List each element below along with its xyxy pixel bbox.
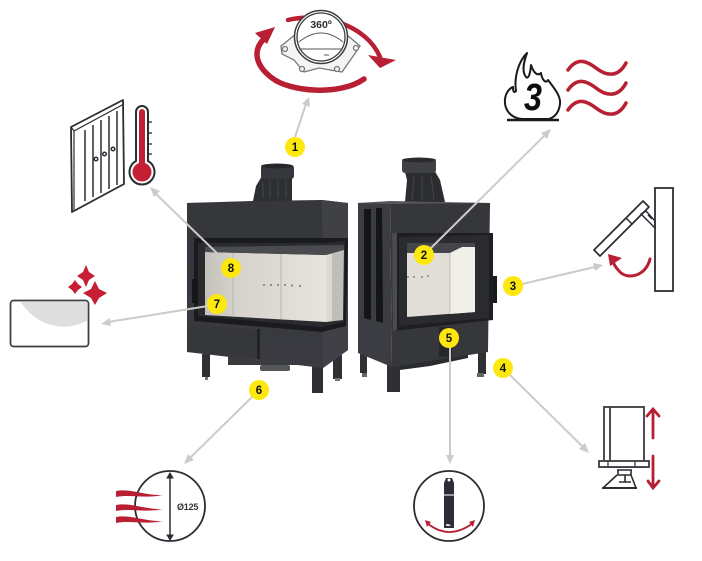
arrow 2 to heat class icon — [431, 129, 551, 248]
badge 1 — [285, 137, 305, 157]
badge 2 — [414, 245, 434, 265]
badge 8 — [221, 258, 241, 278]
arrow 6 to air intake icon — [184, 397, 252, 464]
badge 5 — [439, 328, 459, 348]
badge 4: 4 — [500, 363, 507, 375]
side panel — [358, 202, 392, 367]
door handle — [493, 276, 497, 303]
arrow 3 to door mount icon — [522, 263, 603, 284]
flue plate — [281, 34, 360, 72]
icon: 360 degree rotating flue: 360º — [310, 19, 332, 31]
front panel — [390, 202, 490, 367]
legs — [202, 354, 342, 393]
badge 5: 5 — [446, 333, 453, 345]
badge 4 — [493, 358, 513, 378]
icon: adjustable legs height — [599, 407, 659, 488]
badge 3: 3 — [510, 281, 516, 293]
arrow 4 to leg height icon — [510, 375, 589, 453]
icon: heat class 3 flame with waves — [505, 53, 626, 120]
icon: air intake diameter 125: Ø125 — [177, 502, 198, 512]
arrow 5 to handle icon — [446, 347, 454, 464]
badge 3 — [503, 276, 523, 296]
door handle — [192, 279, 198, 303]
ceramic dots — [407, 275, 429, 278]
badge 6 — [249, 380, 269, 400]
legs — [360, 350, 486, 392]
badge 2: 2 — [421, 250, 427, 262]
arrow 7 to glass icon — [101, 306, 208, 326]
arrow 1 to rotating flue icon — [295, 97, 310, 137]
left corner fireplace — [187, 164, 348, 393]
icon: 360 degree rotating flue — [255, 10, 396, 90]
flue collar — [402, 158, 445, 202]
icon: clean glass with sparkles — [10, 265, 107, 346]
flue collar — [253, 164, 294, 201]
right front fireplace — [358, 158, 497, 392]
firebox ceramic — [407, 247, 475, 317]
body — [187, 200, 348, 368]
ceramic dots — [263, 284, 301, 287]
door frame — [194, 238, 348, 332]
badge 7 — [207, 294, 227, 314]
badge 1: 1 — [292, 142, 299, 154]
door frame — [392, 233, 493, 331]
icon: air intake diameter 125 — [116, 471, 205, 541]
icon: heat class 3 flame with waves: 3 — [524, 77, 542, 119]
air control recess — [439, 327, 452, 357]
badge 7: 7 — [214, 299, 220, 311]
arrow 8 to door and thermometer icon — [150, 187, 224, 260]
firebox ceramic — [205, 252, 326, 322]
badge 6: 6 — [256, 385, 262, 397]
icon: side-hinged door on wall — [594, 188, 673, 291]
icon: door and thermometer — [71, 100, 154, 212]
icon: air regulator handle — [414, 471, 484, 541]
badge 8: 8 — [228, 263, 235, 275]
side vents — [364, 209, 371, 320]
heat waves — [568, 61, 626, 114]
